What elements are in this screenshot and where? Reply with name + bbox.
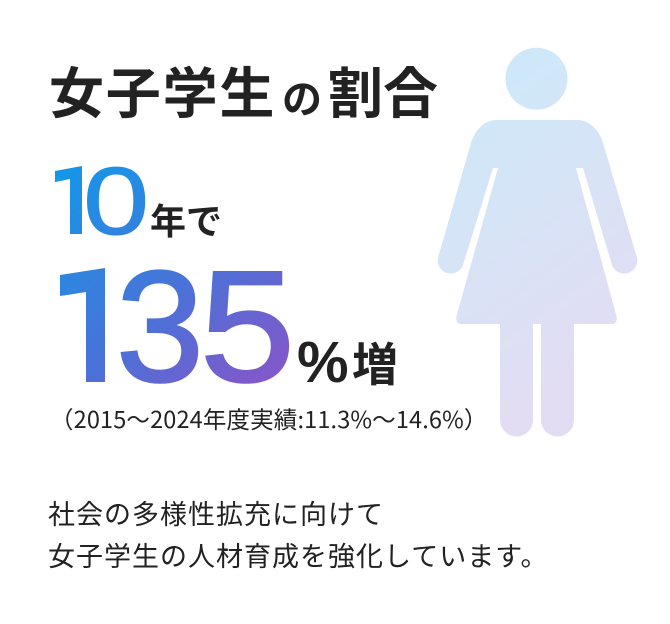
description: 女子学生の人材育成を強化しています。 (48, 535, 548, 574)
stat: 10 years: 年で (150, 193, 222, 245)
stat: 135 percent increase: 5 (200, 238, 295, 415)
stat: 135 percent increase: 3 (116, 239, 204, 415)
stat: 10 years (55, 166, 220, 238)
description (48, 493, 548, 574)
stat: 135 percent increase: % (297, 330, 349, 395)
title: 女子学生 (49, 49, 276, 129)
stat: 135 percent increase: 1 (48, 237, 137, 416)
stat: 10 years: 1 (46, 148, 99, 255)
title: 割合 (328, 49, 438, 129)
description: 社会の多様性拡充に向けて (48, 493, 384, 532)
note: data period: （2015～2024年度実績:11.3%～14.6%） (50, 401, 488, 435)
stat: 10 years: 0 (83, 147, 149, 254)
icon: woman figure (438, 48, 637, 436)
title: の (282, 67, 322, 125)
stat: 135 percent increase: 増 (352, 329, 398, 395)
stat: 135 percent increase (60, 268, 396, 386)
